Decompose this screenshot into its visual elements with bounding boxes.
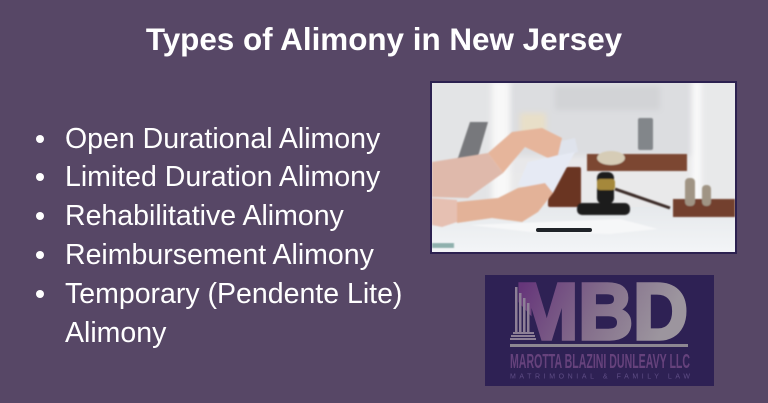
item: temporary: Alimony <box>65 317 166 349</box>
background wall and shelf <box>492 83 702 199</box>
item: temporary: Temporary (Pendente Lite) <box>65 278 402 310</box>
desk organiser <box>673 178 735 217</box>
shelf and bottle <box>587 118 687 171</box>
item: open durational: Open Durational Alimony <box>65 123 380 155</box>
bullet 3 <box>36 212 44 220</box>
bulleted list: alimony types <box>36 123 402 349</box>
bullet 2 <box>36 173 44 181</box>
wooden box <box>548 167 581 207</box>
photo: hands opening a letter beside a gavel <box>430 81 737 254</box>
desk <box>432 233 735 252</box>
bullet 1 <box>36 135 44 143</box>
papers on desk <box>482 220 652 233</box>
laptop <box>457 121 488 159</box>
bullet 5 <box>36 290 44 298</box>
gavel <box>577 172 670 215</box>
item: limited duration: Limited Duration Alimony <box>65 161 380 193</box>
rule <box>510 344 688 347</box>
item: reimbursement: Reimbursement Alimony <box>65 239 374 271</box>
title: Types of Alimony in New Jersey <box>146 22 622 57</box>
column icon <box>510 287 536 342</box>
bullet 4 <box>36 251 44 259</box>
hands, sleeves and letter <box>432 128 578 227</box>
item: rehabilitative: Rehabilitative Alimony <box>65 200 344 232</box>
item: temporary <box>65 278 402 349</box>
tagline: MATRIMONIAL & FAMILY LAW <box>510 374 690 380</box>
logo: Marotta Blazini Dunleavy LLC <box>485 275 714 386</box>
